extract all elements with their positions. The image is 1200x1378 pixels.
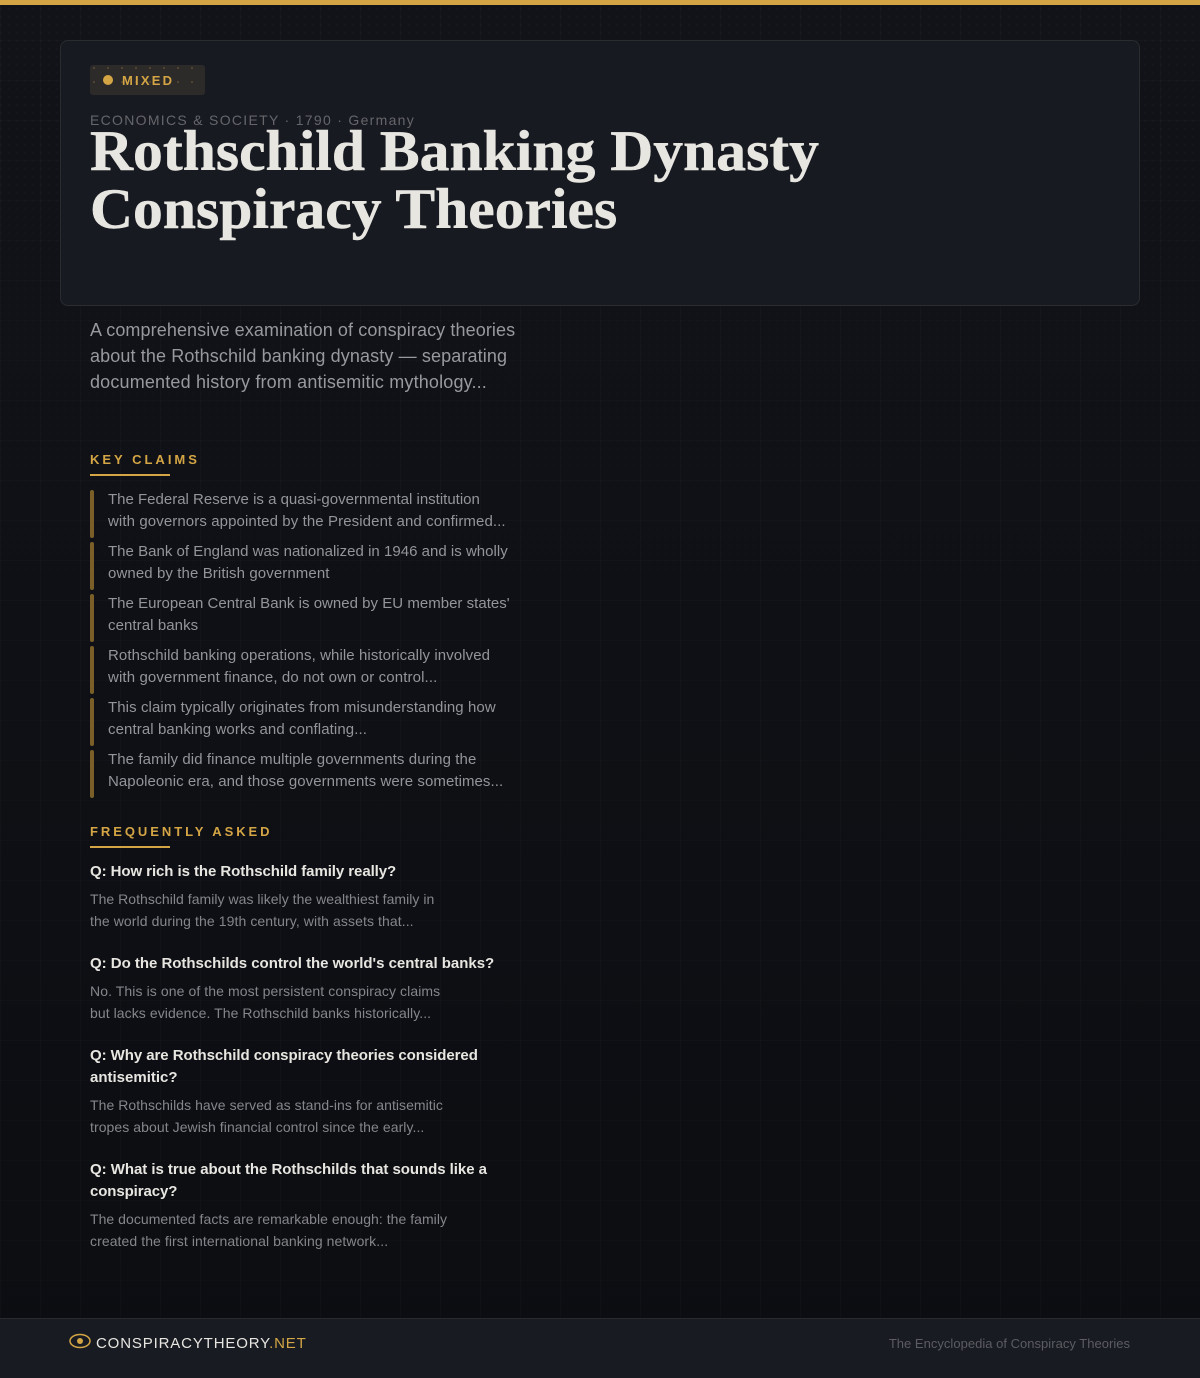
claim 1: The Federal Reserve is a quasi-governmental institution (108, 491, 480, 508)
faq 4 answer: The documented facts are remarkable enough: the family (90, 1211, 447, 1227)
claim 5: This claim typically originates from misunderstanding how (108, 699, 496, 716)
faq 4 answer (90, 1211, 447, 1249)
claim 3: central banks (108, 617, 198, 634)
faq 3 question: antisemitic? (90, 1069, 178, 1086)
title: Rothschild Banking Dynasty (90, 120, 819, 183)
faq 3 answer: The Rothschilds have served as stand-ins for antisemitic (90, 1097, 443, 1113)
claims list (90, 490, 510, 798)
badge label: MIXED (122, 73, 174, 88)
footer logo: CONSPIRACYTHEORY.NET (96, 1335, 307, 1352)
footer tagline: The Encyclopedia of Conspiracy Theories (889, 1336, 1130, 1351)
faq 1 answer (90, 891, 434, 929)
faq 3 question: Q: Why are Rothschild conspiracy theories considered (90, 1047, 478, 1064)
claim 3 (90, 594, 510, 642)
title: Conspiracy Theories (90, 178, 617, 241)
claim 3: The European Central Bank is owned by EU member states' (108, 595, 510, 612)
faq 1 question: Q: How rich is the Rothschild family really? (90, 863, 396, 880)
claim 2: owned by the British government (108, 565, 330, 582)
faq 4 question: conspiracy? (90, 1183, 177, 1200)
faq 4 answer: created the first international banking network... (90, 1233, 388, 1249)
claim 4: with government finance, do not own or control... (108, 669, 437, 686)
claim 1: with governors appointed by the President and confirmed... (108, 513, 506, 530)
claim 6: Napoleonic era, and those governments were sometimes... (108, 773, 503, 790)
summary text: about the Rothschild banking dynasty — separating (90, 346, 507, 366)
claim 4: Rothschild banking operations, while historically involved (108, 647, 490, 664)
faq 2 answer: but lacks evidence. The Rothschild banks historically... (90, 1005, 431, 1021)
category line: ECONOMICS & SOCIETY · 1790 · Germany (90, 112, 415, 128)
footer (0, 1318, 1200, 1378)
claim 2: The Bank of England was nationalized in 1946 and is wholly (108, 543, 508, 560)
faq 4 question (90, 1161, 488, 1200)
faq 2 question: Q: Do the Rothschilds control the world's central banks? (90, 955, 494, 972)
faq 3 answer (90, 1097, 443, 1135)
badge: mixed (90, 65, 205, 95)
title (90, 120, 819, 241)
claim 2 (90, 542, 508, 590)
faq 2 answer: No. This is one of the most persistent conspiracy claims (90, 983, 440, 999)
panel: header (60, 40, 1140, 306)
claim 6: The family did finance multiple governments during the (108, 751, 476, 768)
summary text: documented history from antisemitic mythology... (90, 372, 487, 392)
faq 1 answer: the world during the 19th century, with assets that... (90, 913, 414, 929)
claim 6 (90, 750, 503, 798)
icon: eye (69, 1334, 91, 1348)
top accent bar (0, 0, 1200, 5)
claim 5: central banking works and conflating... (108, 721, 367, 738)
faq 3 question (90, 1047, 478, 1086)
faq 2 answer (90, 983, 440, 1021)
badge dot (103, 75, 113, 85)
claim 1 (90, 490, 506, 538)
text: FREQUENTLY ASKED (90, 824, 273, 839)
claim 4 (90, 646, 490, 694)
faq 4 question: Q: What is true about the Rothschilds that sounds like a (90, 1161, 487, 1178)
summary text (90, 320, 515, 392)
summary text: A comprehensive examination of conspiracy theories (90, 320, 515, 340)
faq 3 answer: tropes about Jewish financial control since the early... (90, 1119, 424, 1135)
heading: key claims: KEY CLAIMS (90, 452, 200, 467)
claim 5 (90, 698, 496, 746)
faq 1 answer: The Rothschild family was likely the wealthiest family in (90, 891, 434, 907)
